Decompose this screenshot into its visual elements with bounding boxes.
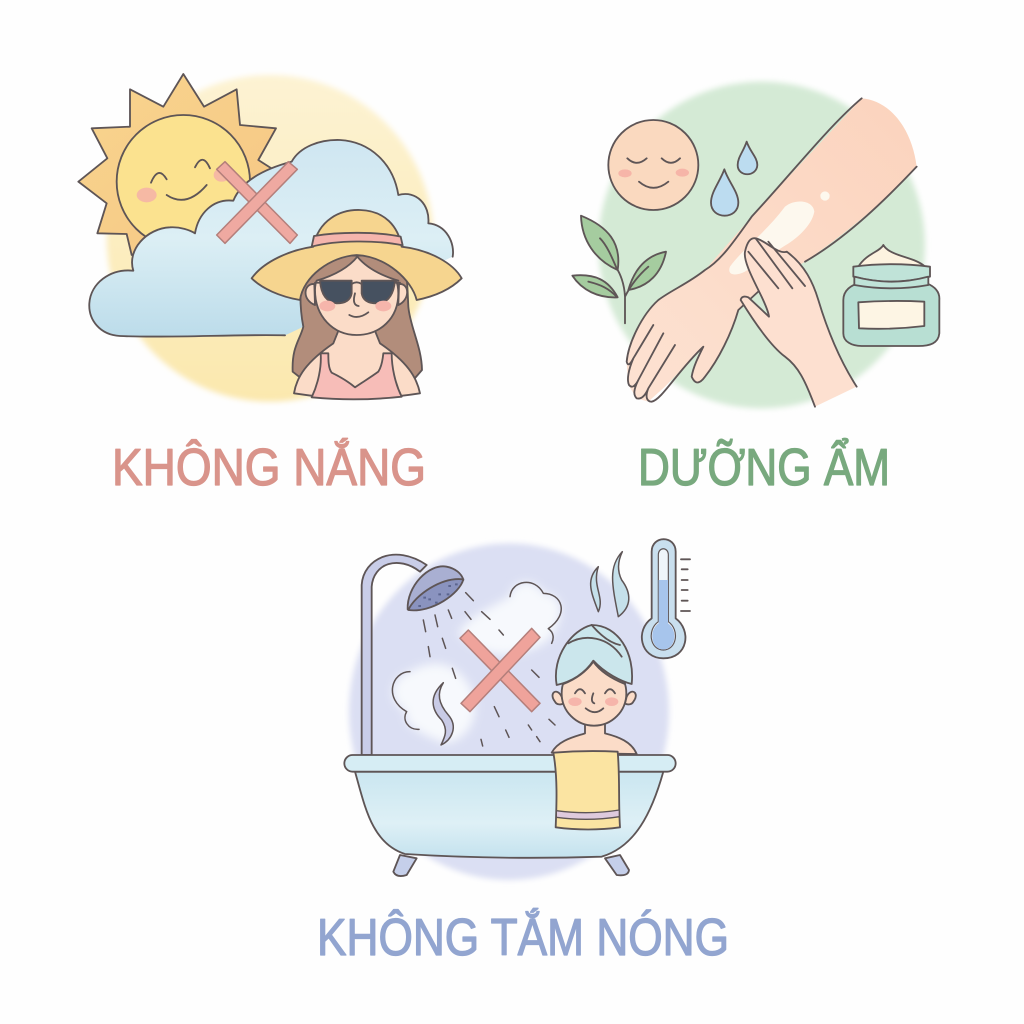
sun face: [137, 160, 230, 202]
water streaks: [423, 593, 555, 746]
arm with lotion: [627, 98, 917, 407]
heading: không tắm nóng: KHÔNG TẮM NÓNG: [317, 908, 729, 967]
hat: [252, 210, 462, 300]
icon: smiling face: [608, 120, 698, 210]
shoulders: [294, 327, 420, 398]
hat band: [312, 233, 403, 247]
icon: cream jar: [843, 245, 939, 346]
panel: dưỡng ẩm: [572, 82, 939, 408]
hair: [293, 257, 422, 380]
icon: cloud: [89, 140, 453, 337]
icon: sun: [78, 74, 276, 255]
heading: không nắng: KHÔNG NẮNG: [112, 438, 426, 497]
icon: yellow towel: [553, 751, 620, 829]
person with towel: [552, 625, 637, 754]
icon: red X: [460, 628, 540, 712]
icon: bathtub: [344, 755, 676, 876]
steam clouds: [392, 582, 561, 743]
panel: không tắm nóng: [344, 539, 690, 880]
icon: shower: [362, 555, 463, 755]
background: yellow circle: [107, 75, 433, 402]
swimsuit: [312, 353, 402, 399]
background: green circle: [598, 82, 925, 408]
icon: thermometer: [642, 539, 690, 658]
sunglasses: [315, 281, 400, 303]
icon: water drops: [711, 142, 757, 216]
hand: [741, 238, 857, 407]
heading: dưỡng ẩm: DƯỠNG ẨM: [638, 438, 890, 497]
face: [315, 257, 398, 335]
background: purple circle: [349, 543, 669, 880]
lotion smear: [729, 201, 814, 274]
panel: không nắng: [78, 74, 462, 402]
woman with sun hat: [252, 210, 462, 399]
icon: leaves: [572, 216, 666, 323]
icon: steam wisps: [433, 552, 629, 745]
icon: red X: [217, 162, 297, 243]
